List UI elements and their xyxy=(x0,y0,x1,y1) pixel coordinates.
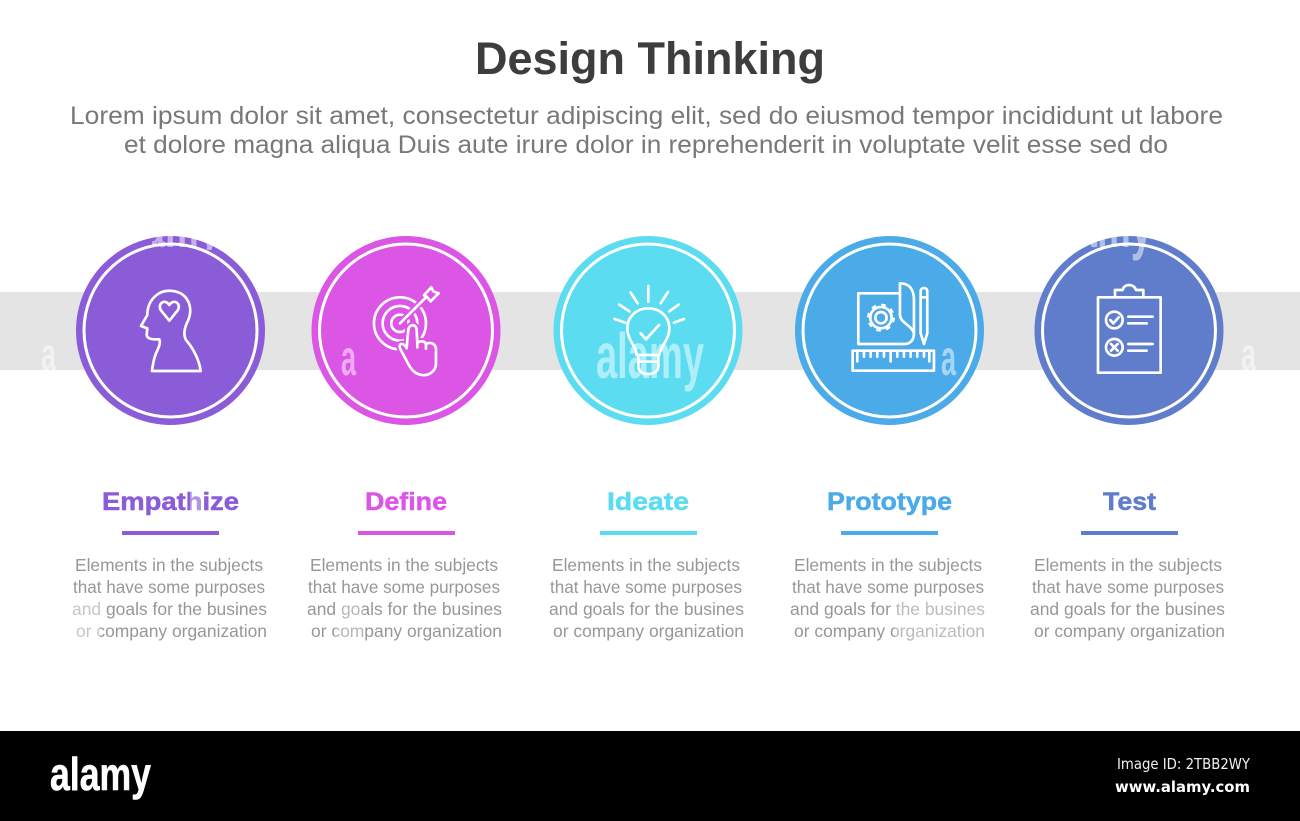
description: that have some purposes xyxy=(550,577,742,597)
circle 3 xyxy=(554,236,742,425)
heading: Empathize: Empathize xyxy=(102,488,239,516)
step 5: Test xyxy=(1030,236,1225,641)
description: and goals for the busines xyxy=(549,599,744,619)
description xyxy=(72,555,267,641)
image id: Image ID: 2TBB2WY xyxy=(1117,755,1251,773)
icon: target with arrow and hand xyxy=(374,287,439,375)
step 2: Define xyxy=(307,236,502,641)
circle 4 xyxy=(795,236,984,425)
horizontal grey band xyxy=(0,292,1300,370)
step 3: Ideate xyxy=(549,236,744,641)
description: that have some purposes xyxy=(1032,577,1224,597)
description: Elements in the subjects xyxy=(794,555,982,575)
description: or company organization xyxy=(76,621,267,641)
description: or company organization xyxy=(553,621,744,641)
description: or company organization xyxy=(311,621,502,641)
subtitle text xyxy=(70,102,1223,159)
heading: Prototype: Prototype xyxy=(827,488,952,516)
heading: Test: Test xyxy=(1103,488,1157,516)
underline xyxy=(358,531,455,535)
description xyxy=(307,555,502,641)
watermarks xyxy=(42,236,1256,640)
step 1: Empathize xyxy=(72,236,267,641)
circle 5 xyxy=(1034,236,1224,425)
description: and goals for the busines xyxy=(1030,599,1225,619)
circle 1 xyxy=(76,236,265,425)
subtitle text: Lorem ipsum dolor sit amet, consectetur adipiscing elit, sed do eiusmod tempor incididunt ut labore xyxy=(70,102,1223,130)
step 4: Prototype xyxy=(790,236,985,641)
underline xyxy=(841,531,938,535)
description: that have some purposes xyxy=(308,577,500,597)
watermarks: a xyxy=(941,330,957,386)
description: that have some purposes xyxy=(73,577,265,597)
description: and goals for the busines xyxy=(72,599,267,619)
description: or company organization xyxy=(794,621,985,641)
description: Elements in the subjects xyxy=(75,555,263,575)
heading: Define: Define xyxy=(365,488,447,516)
watermarks: alamy xyxy=(596,320,704,392)
description xyxy=(1030,555,1225,641)
subtitle text: et dolore magna aliqua Duis aute irure dolor in reprehenderit in voluptate velit esse sed do xyxy=(124,131,1168,159)
website: www.alamy.com xyxy=(1115,778,1250,796)
footer bar xyxy=(0,731,1300,821)
description: and goals for the busines xyxy=(307,599,502,619)
icon: clipboard checklist xyxy=(1098,285,1161,373)
title: Design Thinking xyxy=(475,33,825,84)
watermarks: a xyxy=(1241,328,1256,380)
watermarks: alamy xyxy=(1044,189,1152,261)
circle 2 xyxy=(312,236,500,425)
watermarks: a xyxy=(41,328,56,380)
watermarks: a xyxy=(341,330,357,386)
underline xyxy=(600,531,697,535)
icon: head with heart xyxy=(141,291,201,371)
heading: Ideate: Ideate xyxy=(607,488,689,516)
watermarks: alamy xyxy=(112,189,220,261)
underline xyxy=(122,531,219,535)
description: and goals for the busines xyxy=(790,599,985,619)
icon: light bulb with check xyxy=(615,286,684,374)
description: or company organization xyxy=(1034,621,1225,641)
description: Elements in the subjects xyxy=(552,555,740,575)
icon: blueprint, ruler and pencil xyxy=(853,283,934,371)
description xyxy=(549,555,744,641)
description xyxy=(790,555,985,641)
description: Elements in the subjects xyxy=(310,555,498,575)
footer logo: alamy xyxy=(50,748,151,800)
description: Elements in the subjects xyxy=(1034,555,1222,575)
underline xyxy=(1081,531,1178,535)
description: that have some purposes xyxy=(792,577,984,597)
